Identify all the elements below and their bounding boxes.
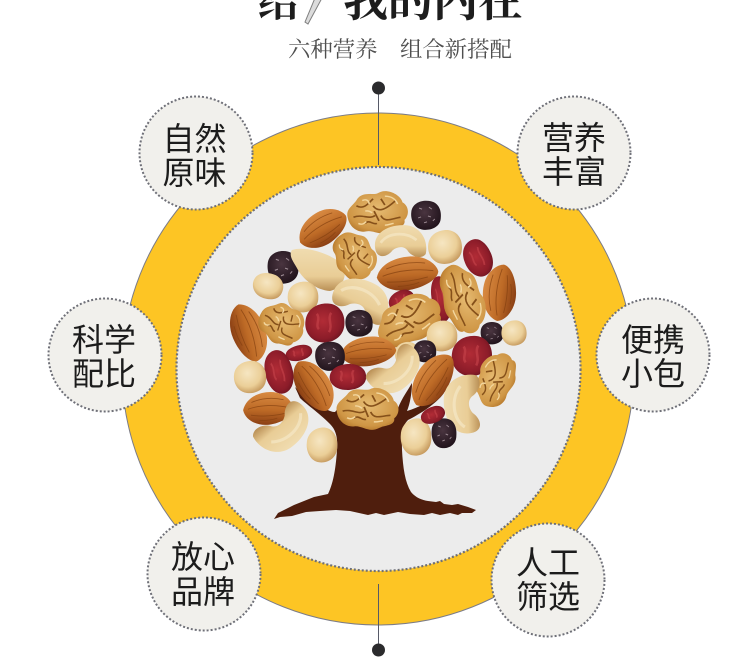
badge: scientific ratio: 科学	[72, 322, 136, 358]
badge: trusted brand: 品牌	[171, 574, 235, 610]
bottom connector	[372, 584, 385, 656]
badge: portable packs: 小包	[621, 356, 685, 392]
tree trunk	[274, 383, 476, 519]
badge: rich nutrition: 营养	[542, 120, 606, 156]
badge: hand selected: 人工	[516, 545, 580, 581]
badge: hand selected	[492, 524, 604, 636]
badge: natural taste: 自然	[162, 121, 227, 157]
yellow ring	[122, 113, 634, 625]
title	[258, 0, 523, 26]
badge: rich nutrition: 丰富	[542, 154, 606, 190]
badge: portable packs: 便携	[621, 322, 685, 358]
subtitle	[288, 37, 512, 62]
badge: natural taste: 原味	[162, 155, 227, 191]
subtitle: 六种营养	[288, 37, 378, 62]
badge: trusted brand	[148, 518, 260, 630]
nut tree canopy	[225, 191, 527, 462]
top connector	[372, 82, 385, 165]
badge: scientific ratio	[48, 298, 162, 412]
badge: rich nutrition	[518, 96, 630, 210]
badge: portable packs	[596, 298, 710, 412]
badge: scientific ratio: 配比	[72, 356, 136, 392]
inner circle	[176, 167, 580, 571]
badge: natural taste	[140, 96, 252, 210]
badge: hand selected: 筛选	[516, 579, 580, 615]
subtitle: 组合新搭配	[400, 37, 512, 62]
badge: trusted brand: 放心	[171, 539, 235, 575]
icon: title slash	[305, 0, 322, 24]
